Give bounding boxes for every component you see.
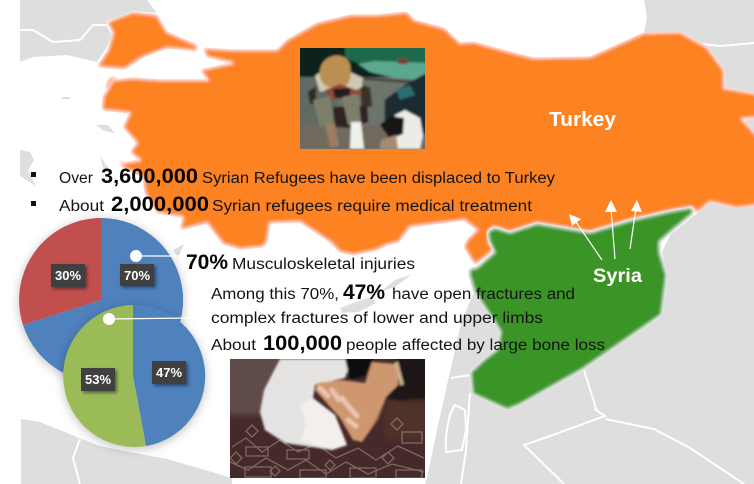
label: 53% xyxy=(81,368,115,391)
pie chart: injury types xyxy=(19,218,183,382)
map: Syria xyxy=(469,207,694,410)
text: open fractures: 47% xyxy=(343,281,385,304)
text: open fractures: have open fractures and xyxy=(392,286,575,303)
map: Turkey xyxy=(97,12,754,265)
statistic: musculoskeletal injuries xyxy=(186,251,415,274)
statistic: large bone loss: people affected by large bone loss xyxy=(346,337,605,354)
statistic: large bone loss: 100,000 xyxy=(263,332,342,355)
arrows: refugee movement from Syria to Turkey xyxy=(569,200,642,260)
statistic: refugees needing treatment: 2,000,000 xyxy=(111,193,209,216)
label: Turkey: Turkey xyxy=(549,109,617,131)
statistic: large bone loss: About xyxy=(211,337,257,354)
statistic: displaced refugees: Syrian Refugees have been displaced to Turkey xyxy=(202,170,555,187)
text: open fractures: Among this 70%, xyxy=(211,286,339,303)
statistic: refugees needing treatment: Syrian refugees require medical treatment xyxy=(212,198,533,215)
leader line: 70% slice xyxy=(130,250,181,262)
statistic: displaced refugees: 3,600,000 xyxy=(101,165,198,188)
statistic: musculoskeletal injuries: 70% xyxy=(186,251,228,274)
label: Syria: Syria xyxy=(593,266,642,287)
label: 53%: 53% xyxy=(85,372,111,387)
statistic: displaced refugees xyxy=(31,165,555,188)
text: open fractures: complex fractures of lower and upper limbs xyxy=(211,310,543,327)
label: 70%: 70% xyxy=(124,268,150,283)
pie chart: fracture types xyxy=(63,305,205,447)
statistic: displaced refugees: Over xyxy=(59,170,93,187)
label: 47%: 47% xyxy=(156,365,182,380)
label: 30%: 30% xyxy=(55,268,81,283)
statistic: refugees needing treatment: About xyxy=(59,198,105,215)
statistic: large bone loss xyxy=(211,332,605,355)
photo: injured child xyxy=(298,46,428,149)
label: 47% xyxy=(152,361,186,384)
statistic: musculoskeletal injuries: Musculoskeletal injuries xyxy=(232,256,415,273)
text: open fractures xyxy=(211,281,575,327)
label: 70% xyxy=(120,264,154,286)
photo: casted foot xyxy=(225,355,430,478)
label: 30% xyxy=(51,264,85,287)
leader line: green slice xyxy=(103,313,192,325)
statistic: refugees needing treatment xyxy=(31,193,533,216)
